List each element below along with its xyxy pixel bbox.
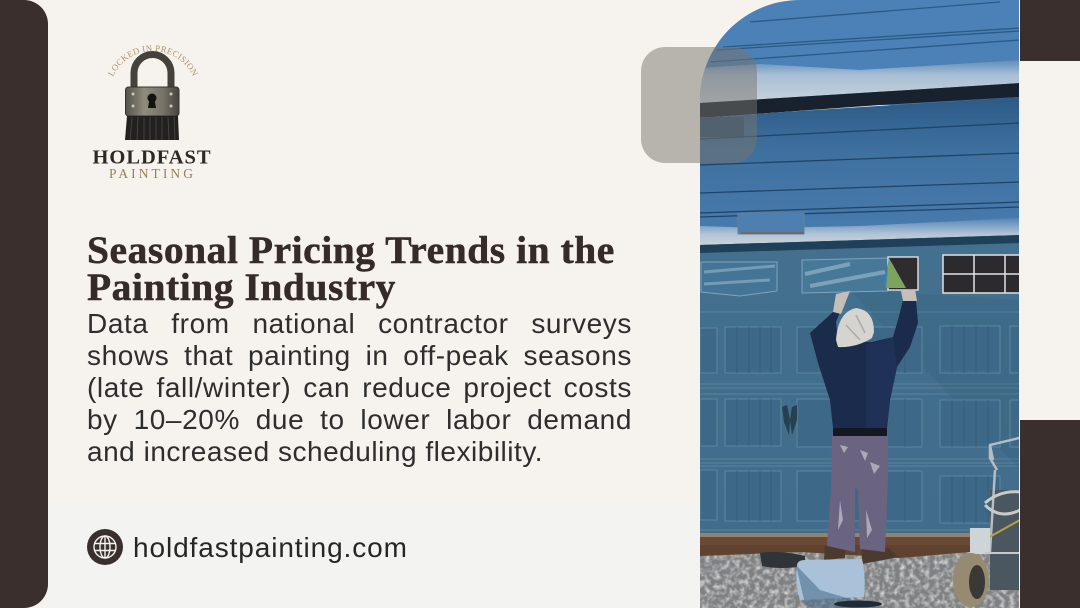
painter jacket (810, 300, 918, 428)
right dark block bottom (1020, 420, 1080, 608)
left dark bar (0, 0, 48, 608)
hose (760, 552, 805, 568)
painter hands (833, 289, 917, 314)
ground: gravel (700, 533, 1020, 608)
lower siding (700, 97, 1020, 250)
small siding patch (738, 213, 804, 234)
cart with rope (953, 438, 1020, 607)
body text: and increased scheduling flexibility. (87, 436, 543, 467)
footer band (48, 503, 700, 608)
covered window left (701, 262, 777, 296)
right dark block top (1020, 0, 1080, 61)
painter belt (833, 428, 887, 436)
body text: (late fall/winter) can reduce project costs (87, 372, 632, 403)
painter boots (824, 546, 899, 564)
icon: padlock shackle (134, 54, 171, 88)
door handle (782, 405, 797, 435)
lower painted band (700, 218, 1020, 245)
body text: Data from national contractor surveys (87, 308, 632, 339)
logo name: HOLDFAST (92, 146, 211, 168)
title: Painting Industry (87, 264, 396, 308)
panel grooves (737, 326, 988, 523)
photo: painter at a blue garage door (700, 0, 1019, 608)
painter hard hat (836, 308, 874, 347)
bucket on the ground (796, 559, 882, 608)
logo subtitle: PAINTING (109, 166, 193, 181)
body text: by 10–20% due to lower labor demand (87, 404, 632, 435)
door panels (700, 326, 1022, 523)
upper siding (700, 0, 1020, 105)
dark eave shadow (700, 83, 1020, 118)
covered window centre (802, 258, 888, 293)
icon: brush bristles (125, 116, 179, 140)
logo: Holdfast Painting (92, 45, 211, 181)
icon: padlock body (126, 87, 179, 116)
body text: shows that painting in off-peak seasons (87, 340, 632, 371)
window with tape (888, 257, 918, 290)
body text (87, 308, 632, 467)
right window (943, 255, 1023, 293)
website url: holdfastpainting.com (133, 532, 408, 563)
painter trousers (827, 433, 888, 552)
painted wash band (700, 60, 1020, 103)
icon: globe (87, 529, 123, 565)
painter (810, 289, 918, 564)
tagline: locked in precision: LOCKED IN PRECISION (108, 45, 198, 77)
garage door (700, 235, 1020, 540)
title (87, 228, 615, 309)
title: Seasonal Pricing Trends in the (87, 228, 615, 272)
accent rounded square (641, 47, 757, 163)
